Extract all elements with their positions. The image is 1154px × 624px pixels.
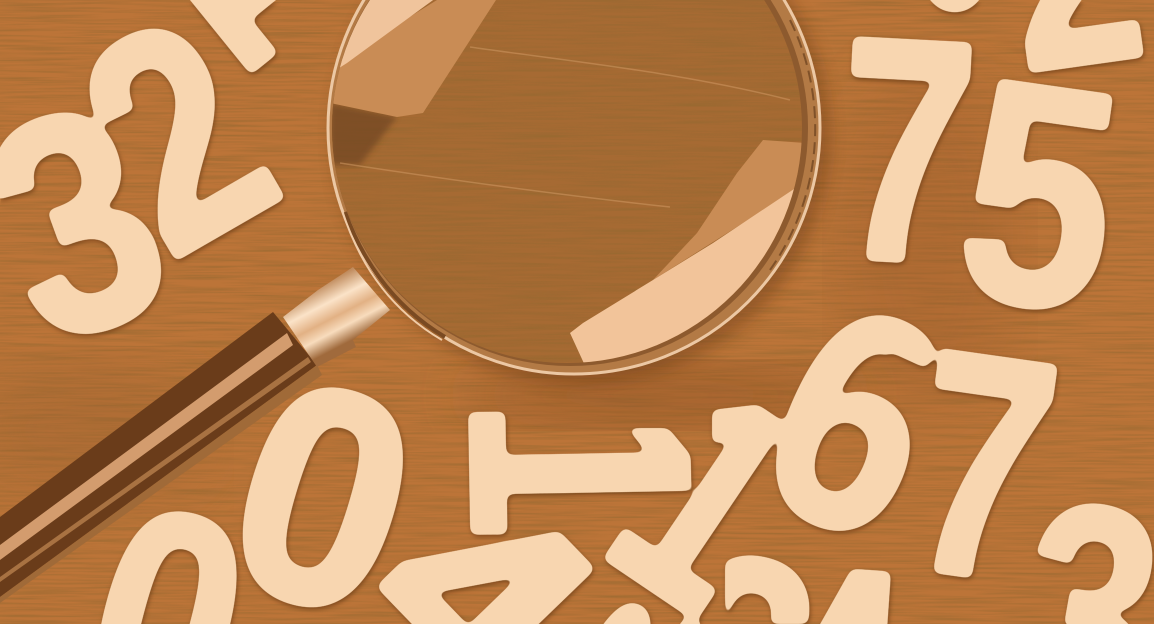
magnifying glass xyxy=(0,0,830,603)
lower light reflection xyxy=(570,185,800,370)
ferrule xyxy=(283,267,390,367)
number 6: 6 xyxy=(718,233,993,608)
handle xyxy=(0,312,322,603)
grain line, lower xyxy=(340,163,670,207)
upper light reflection xyxy=(340,0,433,68)
dark patch, left xyxy=(330,103,397,165)
lower mid reflection xyxy=(653,140,805,280)
lens bezel inner ring xyxy=(332,0,808,366)
lens ridge highlight xyxy=(342,210,442,340)
lens contents xyxy=(330,0,810,370)
number 5, right: 5 xyxy=(941,11,1138,381)
lens ridge, lower left xyxy=(345,212,445,337)
lens rim xyxy=(328,0,820,374)
lens shadow xyxy=(334,0,830,384)
lens glass xyxy=(332,0,802,363)
bezel shading, right xyxy=(770,20,815,270)
upper mid reflection xyxy=(330,0,496,117)
grain line, upper xyxy=(470,47,790,100)
number 1, lying sideways: 1 xyxy=(403,393,758,541)
wood grain in lens xyxy=(330,0,810,370)
